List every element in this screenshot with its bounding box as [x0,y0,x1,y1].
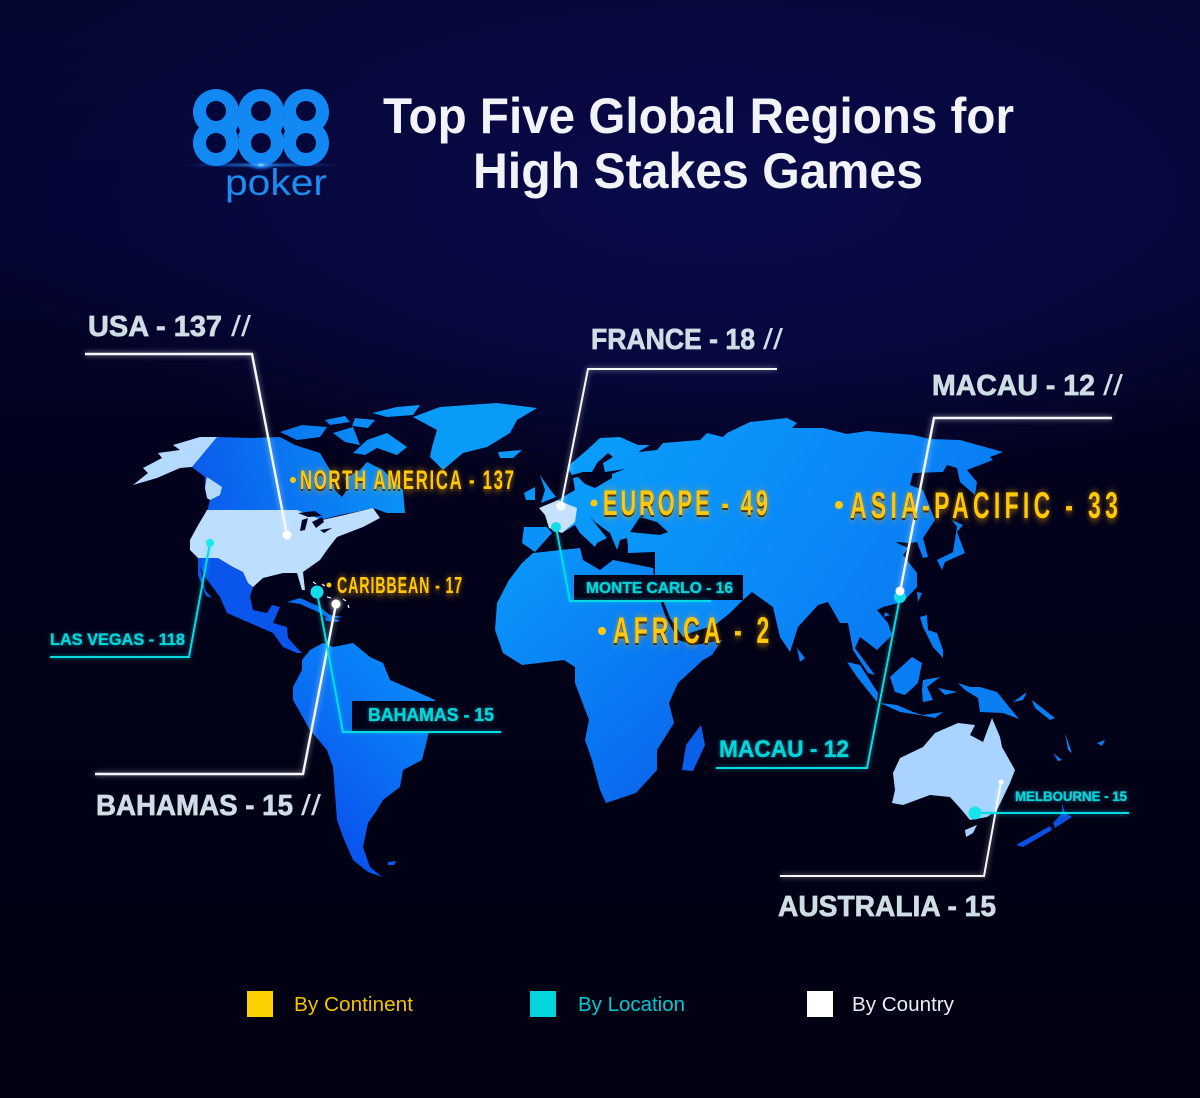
legend item: By Location: By Location [578,994,685,1016]
callout: Melbourne [968,788,1129,820]
continent label: Europe: EUROPE - 49 [603,485,768,523]
callout: USA: USA - 137 [88,311,222,343]
callout: Macau location [716,586,906,768]
legend [247,991,954,1017]
map: South America [293,643,435,877]
title [383,88,1014,199]
logo: 888poker [181,89,341,203]
map: Africa [495,548,722,803]
callout: France: FRANCE - 18 [591,324,755,356]
callout: Las Vegas: LAS VEGAS - 118 [50,630,185,649]
callout: Bahamas location: BAHAMAS - 15 [368,705,494,725]
callout: USA: // [231,311,252,343]
map: Eurasia [558,418,1003,675]
legend item: By Location [530,991,685,1017]
map: Iceland [498,450,522,458]
continent label: Asia-Pacific: ASIA-PACIFIC - 33 [850,484,1118,526]
legend item: By Continent: By Continent [294,994,413,1016]
map: France [539,500,577,533]
label box: Monte Carlo location [574,575,743,600]
callout: Monte Carlo [551,522,733,601]
callout: Macau country [900,370,1124,592]
title: Top Five Global Regions for [383,88,1014,144]
callout: Melbourne: MELBOURNE - 15 [1015,788,1127,804]
legend item: By Country: By Country [852,994,954,1016]
map: USA [190,508,380,590]
continent label: Africa: AFRICA - 2 [613,609,769,651]
label box: Bahamas location [352,701,497,731]
callout: Australia [778,780,1004,923]
callout: Macau country: MACAU - 12 [932,370,1095,402]
map: Madagascar [682,725,705,771]
continent label: Caribbean: CARIBBEAN - 17 [337,574,462,599]
map: Alaska [133,437,222,500]
map: Australia [892,718,1015,837]
map: Asia-Pacific islands [797,520,1105,761]
map: New Zealand [1016,803,1072,847]
map: North America [192,405,420,653]
legend item: By Continent [247,991,413,1017]
callout: USA [85,311,292,540]
callout: Australia: AUSTRALIA - 15 [778,891,996,923]
map: Spain [522,527,552,552]
title: High Stakes Games [473,143,923,199]
callout: Monte Carlo: MONTE CARLO - 16 [586,580,733,597]
legend item: By Country [807,991,954,1017]
map: Great Lakes [298,511,332,533]
map: Greenland [413,403,537,470]
callout: France [556,324,784,510]
callout: Bahamas location [310,586,501,732]
continent label: North America: NORTH AMERICA - 137 [300,465,514,495]
callout: Bahamas country: // [301,790,322,822]
map: UK and Ireland [524,475,556,503]
callout: Las Vegas [50,539,214,657]
callout: Bahamas country: BAHAMAS - 15 [96,790,293,822]
logo: 888poker: poker [225,162,327,203]
callout: Macau country: // [1103,370,1124,402]
callout: Bahamas country [95,604,336,822]
marker: Bahamas white dot [313,582,349,608]
world map [133,403,1105,877]
callout: France: // [763,324,784,356]
callout: Macau location: MACAU - 12 [719,736,849,763]
